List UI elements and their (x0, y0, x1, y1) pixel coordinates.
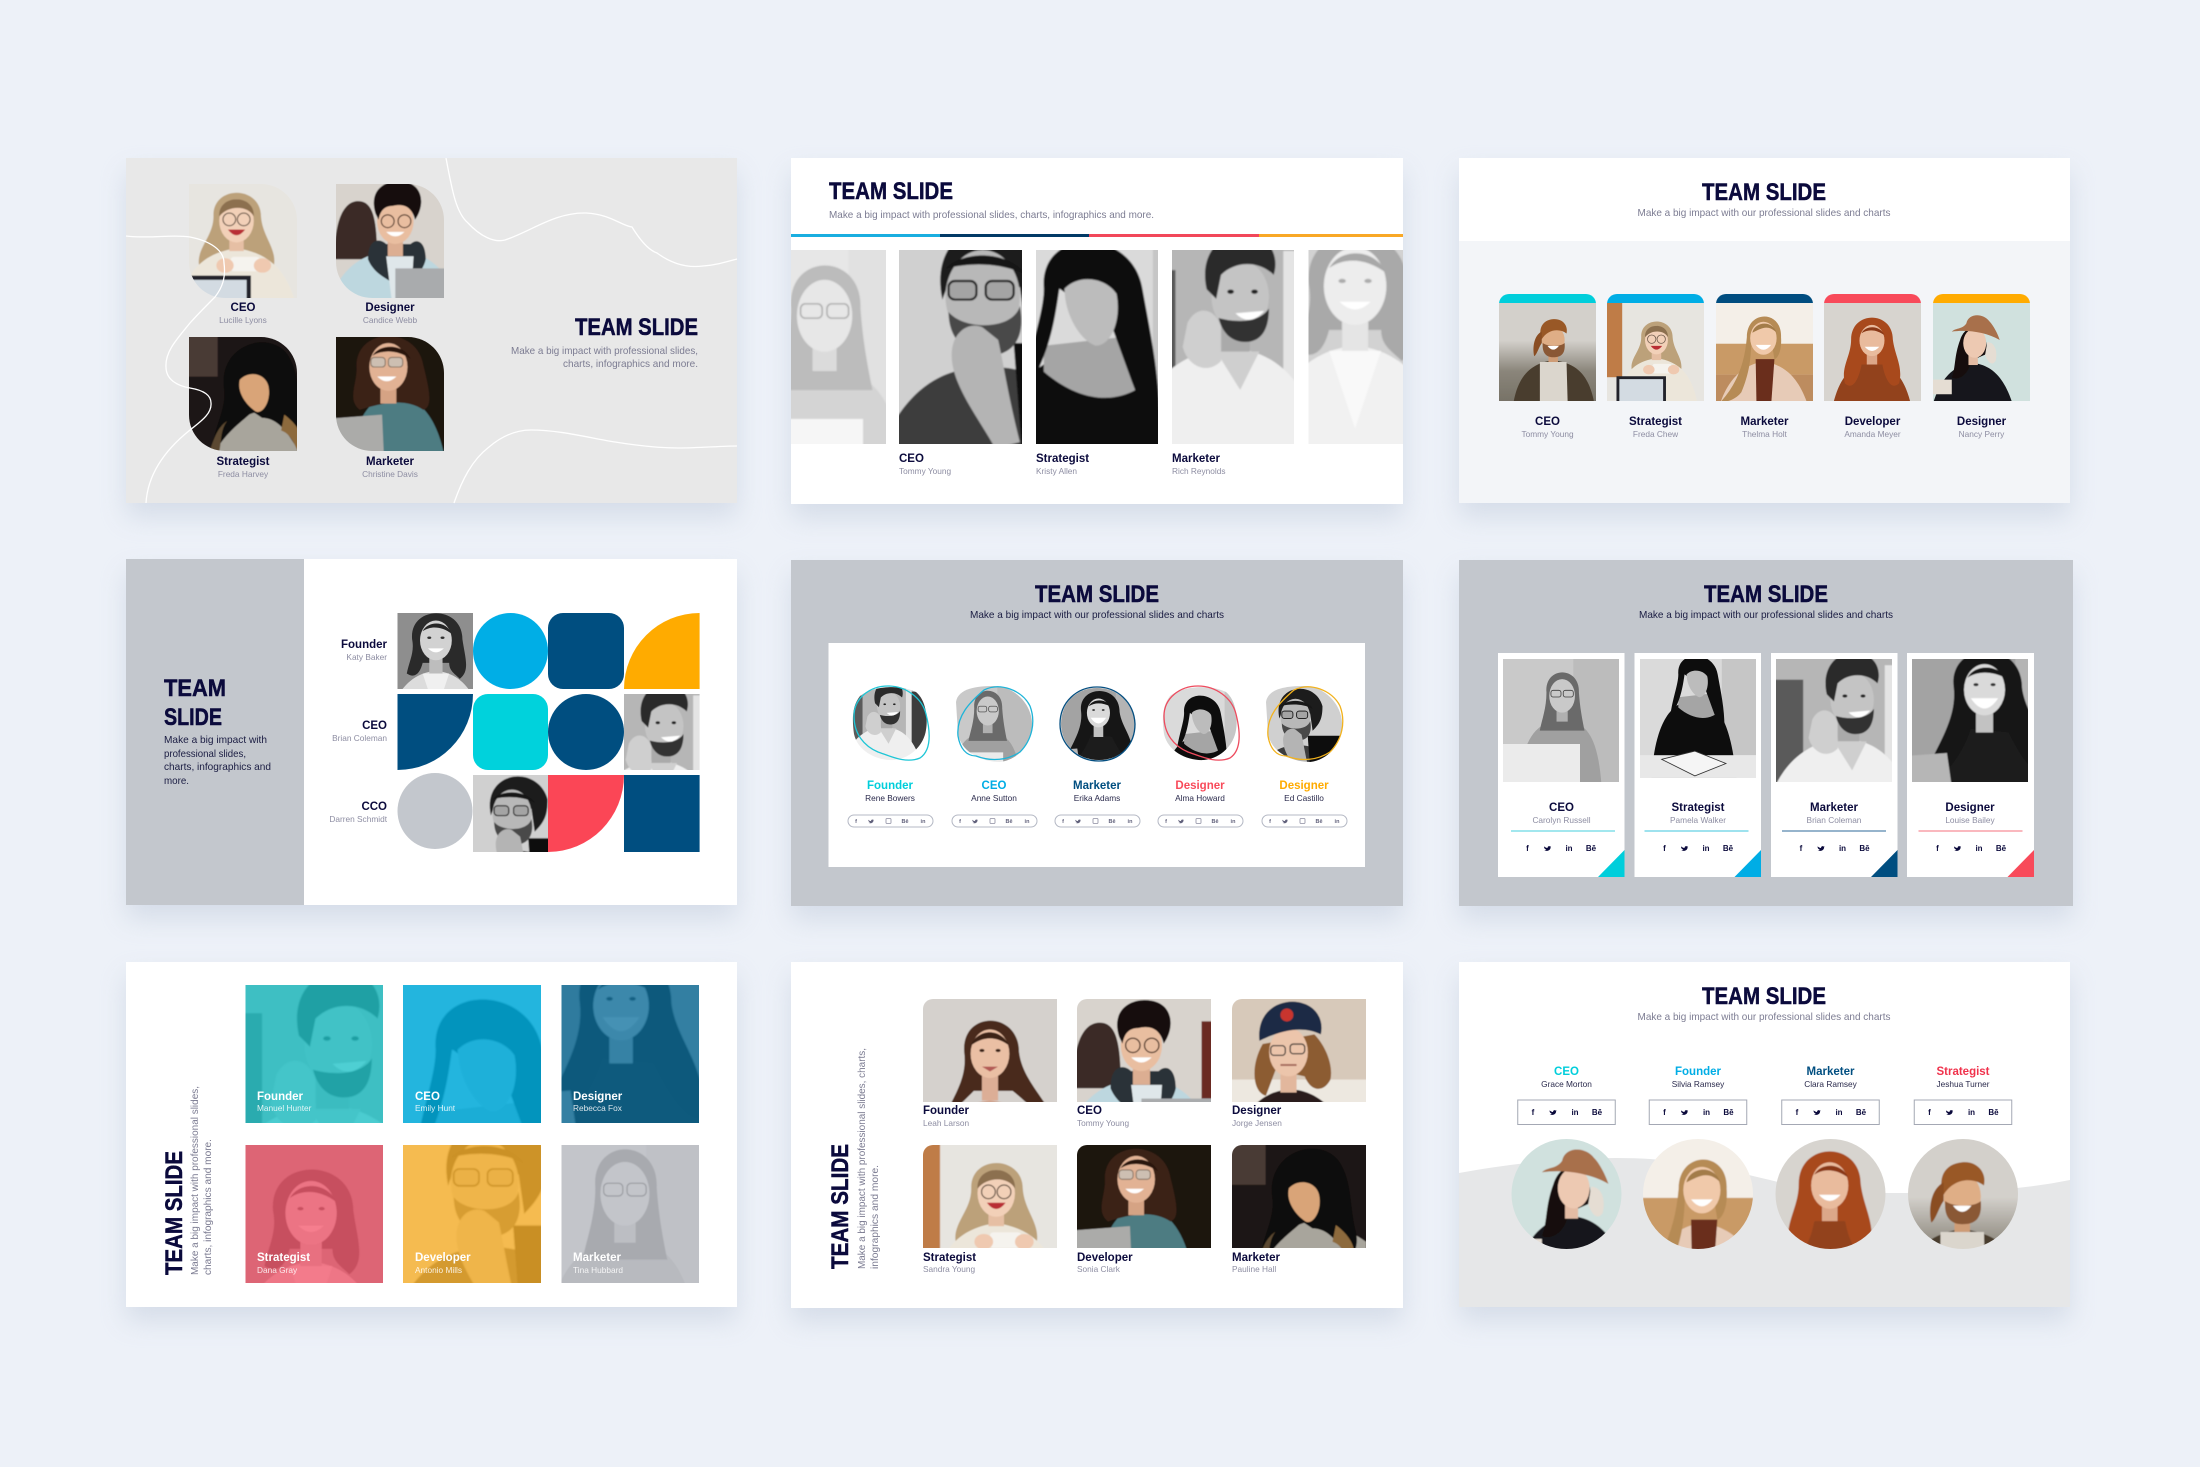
subtitle: vertical (856, 1048, 881, 1269)
panel: team slide 6, monochrome profile cards (1439, 527, 2172, 920)
label: CEO: CEO (1077, 1105, 1102, 1117)
label: Strategist: Freda Harvey (218, 469, 269, 479)
member: Founder: f (855, 819, 857, 825)
member: Designer orange: Bē (1315, 819, 1323, 825)
label: Founder: Leah Larson (923, 1118, 970, 1128)
panel: team slide 4, geometric mosaic (126, 515, 838, 968)
member: Marketer: f (1796, 1108, 1799, 1117)
member: CEO: Anne Sutton (971, 793, 1017, 803)
member: Marketer (1776, 1066, 1886, 1249)
subtitle: vertical: charts, infographics and more. (202, 1139, 214, 1275)
text block (511, 345, 698, 370)
label: Strategist: Sandra Young (923, 1264, 976, 1274)
label: Founder (341, 639, 388, 662)
label: Developer: Developer (1077, 1252, 1133, 1264)
tile: CEO: CEO (415, 1091, 440, 1103)
member: CEO (1512, 1066, 1622, 1249)
heading: vertical: TEAM SLIDE (827, 1144, 854, 1269)
member: CEO: CEO (982, 780, 1007, 792)
card: Strategist: in (1702, 844, 1710, 853)
subtitle: vertical: Make a big impact with professional slides, charts, (856, 1048, 868, 1269)
member: Designer red: Bē (1211, 819, 1219, 825)
card: Designer: Louise Bailey (1945, 815, 1996, 825)
tile: Founder: Manuel Hunter (257, 1103, 312, 1113)
tile: Developer (175, 915, 794, 1451)
panel: team slide 1, rounded portraits with curves (120, 158, 742, 522)
tile: Marketer: Tina Hubbard (573, 1265, 623, 1275)
subtitle: Make a big impact with our professional slides and charts (1638, 207, 1890, 219)
card: Designer: Nancy Perry (1959, 429, 2005, 439)
card: Marketer (1642, 234, 1885, 443)
label: Marketer: Rich Reynolds (1172, 466, 1226, 476)
card: Designer: Designer (1945, 802, 1995, 814)
member: Founder: Bē (901, 819, 909, 825)
panel: team slide 7, duotone tiles (23, 777, 874, 1451)
member: Founder: Founder (867, 780, 914, 792)
text block: charts, infographics and more. (563, 358, 698, 370)
card: Marketer: Bē (1859, 844, 1870, 853)
member: Designer orange: Ed Castillo (1284, 793, 1324, 803)
subtitle: vertical: infographics and more. (869, 1165, 881, 1269)
portrait: CEO (1077, 999, 1211, 1102)
label: Designer: Jorge Jensen (1232, 1118, 1282, 1128)
member: Founder: in (1703, 1108, 1710, 1117)
card: Strategist: Strategist (1671, 802, 1725, 814)
member: Marketer: Erika Adams (1074, 793, 1120, 803)
label: Marketer: Marketer (1232, 1252, 1280, 1264)
tile: Designer: Rebecca Fox (573, 1103, 623, 1113)
member: Strategist: f (1928, 1108, 1931, 1117)
label: Strategist: Strategist (923, 1252, 976, 1264)
panel: team slide 9, circular portraits over wave (1454, 962, 2076, 1326)
portrait: Founder (398, 613, 473, 689)
card: Marketer: Thelma Holt (1742, 429, 1788, 439)
member: Marketer: in (1835, 1108, 1843, 1117)
text block: professional slides, (164, 748, 246, 760)
tile: Strategist (78, 1011, 545, 1415)
panel: team slide 5, blob portraits with social pills (781, 560, 1431, 920)
member: CEO (952, 686, 1038, 828)
portrait: CEO (624, 694, 700, 770)
colour divider (791, 234, 1403, 237)
member: CEO: f (959, 819, 961, 825)
text block (164, 734, 271, 787)
label: CEO: Brian Coleman (332, 733, 387, 743)
label: Marketer: Marketer (366, 456, 414, 468)
card: Marketer: in (1839, 844, 1846, 853)
member: Designer orange: f (1269, 819, 1271, 825)
card: Designer: in (1975, 844, 1983, 853)
tile: Designer (368, 787, 874, 1224)
member: Strategist: Bē (1988, 1108, 1999, 1117)
member: CEO: Bē (1005, 819, 1013, 825)
card: Marketer: Marketer (1810, 802, 1858, 814)
label: CEO (219, 302, 267, 325)
portrait: Founder (923, 999, 1057, 1102)
label: Founder: Founder (341, 639, 388, 651)
label: Designer (363, 302, 418, 325)
label: Marketer: Christine Davis (362, 469, 418, 479)
tile: Founder (23, 777, 642, 1312)
subtitle: vertical: Make a big impact with professional slides, (189, 1086, 201, 1275)
heading: TEAM SLIDE (575, 314, 698, 341)
card: Designer: Bē (1996, 844, 2007, 853)
portrait: Designer (336, 184, 444, 298)
label: Founder (923, 1105, 970, 1128)
label: Designer: Designer (1232, 1105, 1282, 1117)
label: Marketer (362, 456, 418, 479)
card: Designer (1860, 244, 2089, 442)
portrait: Developer (1077, 1145, 1211, 1248)
portrait: Strategist (923, 1145, 1057, 1248)
card: Strategist: Strategist (1629, 416, 1682, 428)
heading: TEAM SLIDE (1702, 179, 1826, 206)
member: Founder: Founder (1675, 1066, 1722, 1078)
label: CEO (899, 453, 952, 476)
member: Designer red: Alma Howard (1175, 793, 1225, 803)
heading: TEAM SLIDE (1704, 581, 1828, 608)
label: CEO: Tommy Young (899, 466, 952, 476)
subtitle: Make a big impact with our professional slides and charts (1639, 609, 1893, 621)
label: Strategist: Strategist (216, 456, 270, 468)
member: Marketer: Bē (1108, 819, 1116, 825)
card: Developer (1757, 241, 1987, 440)
member: Marketer: Clara Ramsey (1804, 1079, 1858, 1089)
tile: CEO (171, 796, 790, 1331)
shape: navy quarter (398, 694, 473, 770)
card: Developer: Amanda Meyer (1844, 429, 1901, 439)
portrait: Marketer (336, 337, 444, 451)
label: Founder: Founder (923, 1105, 970, 1117)
text block: more. (164, 775, 189, 787)
member: Designer red: in (1231, 819, 1236, 825)
label: CEO: CEO (899, 453, 924, 465)
portrait: Strategist (1036, 250, 1158, 444)
subtitle: Make a big impact with our professional slides and charts (1638, 1011, 1890, 1023)
panel: team slide 3, five colour-topped cards (1449, 158, 2089, 517)
white card (828, 643, 1365, 867)
label: Strategist (216, 456, 270, 479)
portrait: CEO (191, 192, 295, 298)
tile: Designer: Designer (573, 1091, 623, 1103)
label: Developer (1077, 1252, 1133, 1274)
label: Designer: Candice Webb (363, 315, 418, 325)
label: Founder: Katy Baker (346, 652, 387, 662)
portrait: Marketer (1232, 1145, 1366, 1248)
label: CCO (329, 801, 388, 824)
tile: Marketer: Marketer (573, 1252, 621, 1264)
subtitle: Make a big impact with professional slides, charts, infographics and more. (829, 209, 1154, 221)
panel: team slide 2, tall monochrome portraits (561, 2, 1640, 591)
label: CEO (332, 720, 387, 743)
card: Marketer: Marketer (1741, 416, 1789, 428)
shape: navy circle (548, 694, 624, 770)
card: Developer: Developer (1845, 416, 1901, 428)
card: Marketer: Brian Coleman (1807, 815, 1862, 825)
subtitle: vertical (189, 1086, 214, 1275)
member: Strategist (1908, 1066, 2018, 1249)
label: Strategist: Strategist (1036, 453, 1089, 465)
shape: teal square (473, 694, 548, 770)
member: Strategist: in (1968, 1108, 1975, 1117)
shape: orange quarter (624, 613, 700, 689)
label: Developer: Sonia Clark (1077, 1264, 1121, 1274)
label: Strategist (1036, 453, 1089, 476)
card: Strategist: Bē (1723, 844, 1734, 853)
tile: Founder: Founder (257, 1091, 304, 1103)
card: Designer: f (1936, 844, 1939, 853)
text block: Make a big impact with (164, 734, 267, 746)
card: CEO: Tommy Young (1521, 429, 1574, 439)
member: CEO: Grace Morton (1541, 1079, 1592, 1089)
card: Strategist (1552, 250, 1761, 439)
subtitle: Make a big impact with our professional slides and charts (970, 609, 1224, 621)
member: Marketer: Marketer (1807, 1066, 1855, 1078)
label: CEO: Lucille Lyons (219, 315, 267, 325)
label: Marketer (1232, 1252, 1280, 1274)
tile: Strategist: Strategist (257, 1252, 310, 1264)
card: CEO (1439, 590, 1685, 877)
card: CEO: in (1565, 844, 1573, 853)
shape: red quarter (548, 775, 624, 852)
card: Strategist: Pamela Walker (1670, 815, 1726, 825)
member: Designer orange (1262, 686, 1348, 828)
card: CEO: Bē (1586, 844, 1597, 853)
portrait: faded right (1070, 40, 1640, 532)
portrait: Marketer (1172, 250, 1294, 444)
member: Founder: Silvia Ramsey (1672, 1079, 1725, 1089)
card: Strategist: f (1663, 844, 1666, 853)
portrait: CCO (473, 775, 548, 852)
card: CEO: Carolyn Russell (1532, 815, 1591, 825)
decorative white curves (126, 158, 737, 503)
label: Marketer: Pauline Hall (1232, 1264, 1276, 1274)
card: CEO (1449, 250, 1658, 439)
member: Designer orange: Designer (1279, 780, 1329, 792)
label: CEO: CEO (362, 720, 387, 732)
member: Marketer: Bē (1856, 1108, 1867, 1117)
card: Designer (1797, 527, 2172, 877)
heading: SLIDE (164, 704, 222, 731)
member: Founder (1643, 1066, 1753, 1249)
label: Designer (1232, 1105, 1282, 1128)
label: CCO: CCO (361, 801, 387, 813)
tile: Developer: Developer (415, 1252, 471, 1264)
panel: team slide 8, six colour portraits (786, 962, 1408, 1327)
tile: Marketer (391, 992, 858, 1396)
tile: Developer: Antonio Mills (415, 1265, 462, 1275)
card: CEO: f (1526, 844, 1529, 853)
tile: CEO: Emily Hunt (415, 1103, 456, 1113)
member: CEO: Bē (1592, 1108, 1603, 1117)
card: Strategist: Freda Chew (1633, 429, 1679, 439)
member: Designer red (1158, 685, 1244, 828)
shape: navy block (624, 775, 700, 852)
heading: TEAM SLIDE (1035, 581, 1159, 608)
mosaic grid (290, 515, 838, 968)
label: Strategist: Kristy Allen (1036, 466, 1077, 476)
portrait: CEO (899, 250, 1022, 444)
heading: TEAM SLIDE (829, 178, 953, 205)
member: CEO: in (1025, 819, 1030, 825)
text block: charts, infographics and (164, 761, 271, 773)
label: CCO: Darren Schmidt (329, 814, 388, 824)
card: Marketer: f (1800, 844, 1803, 853)
member: Strategist: Jeshua Turner (1936, 1079, 1990, 1089)
label: Marketer: Marketer (1172, 453, 1220, 465)
card: CEO: CEO (1549, 802, 1574, 814)
heading: TEAM SLIDE (1702, 983, 1826, 1010)
member: Founder: Rene Bowers (865, 793, 915, 803)
label: CEO (1077, 1105, 1130, 1128)
heading (164, 675, 226, 731)
member: Designer red: Designer (1175, 780, 1225, 792)
member: Marketer: f (1062, 819, 1064, 825)
member: Marketer: Marketer (1073, 780, 1121, 792)
portrait: Designer (1232, 999, 1366, 1102)
label: Designer: Designer (365, 302, 415, 314)
member: Designer orange: in (1335, 819, 1340, 825)
text block: Make a big impact with professional slides, (511, 345, 698, 357)
shape: navy square (548, 613, 624, 689)
member: Designer red: f (1165, 819, 1167, 825)
member: CEO: f (1532, 1108, 1535, 1117)
member: Marketer: in (1128, 819, 1133, 825)
label: CEO: Tommy Young (1077, 1118, 1130, 1128)
member: CEO: in (1571, 1108, 1579, 1117)
member: Founder (848, 685, 934, 828)
member: Founder: f (1663, 1108, 1666, 1117)
card: Marketer (1649, 527, 2048, 877)
shape: blue circle (473, 613, 548, 689)
heading: vertical: TEAM SLIDE (161, 1151, 188, 1275)
label: Marketer (1172, 453, 1226, 476)
card: Strategist (1581, 581, 1809, 877)
portrait: Strategist (189, 337, 297, 451)
member: Founder: in (921, 819, 926, 825)
tile: Strategist: Dana Gray (257, 1265, 298, 1275)
member: Marketer (1054, 686, 1140, 828)
member: Founder: Bē (1723, 1108, 1734, 1117)
member: CEO: CEO (1554, 1066, 1579, 1078)
heading: TEAM (164, 675, 226, 702)
label: CEO: CEO (231, 302, 256, 314)
label: Strategist (923, 1252, 976, 1274)
card: Designer: Designer (1957, 416, 2007, 428)
portrait: faded left (561, 88, 1088, 544)
card: CEO: CEO (1535, 416, 1560, 428)
member: Strategist: Strategist (1936, 1066, 1990, 1078)
shape: grey circle (398, 773, 472, 849)
